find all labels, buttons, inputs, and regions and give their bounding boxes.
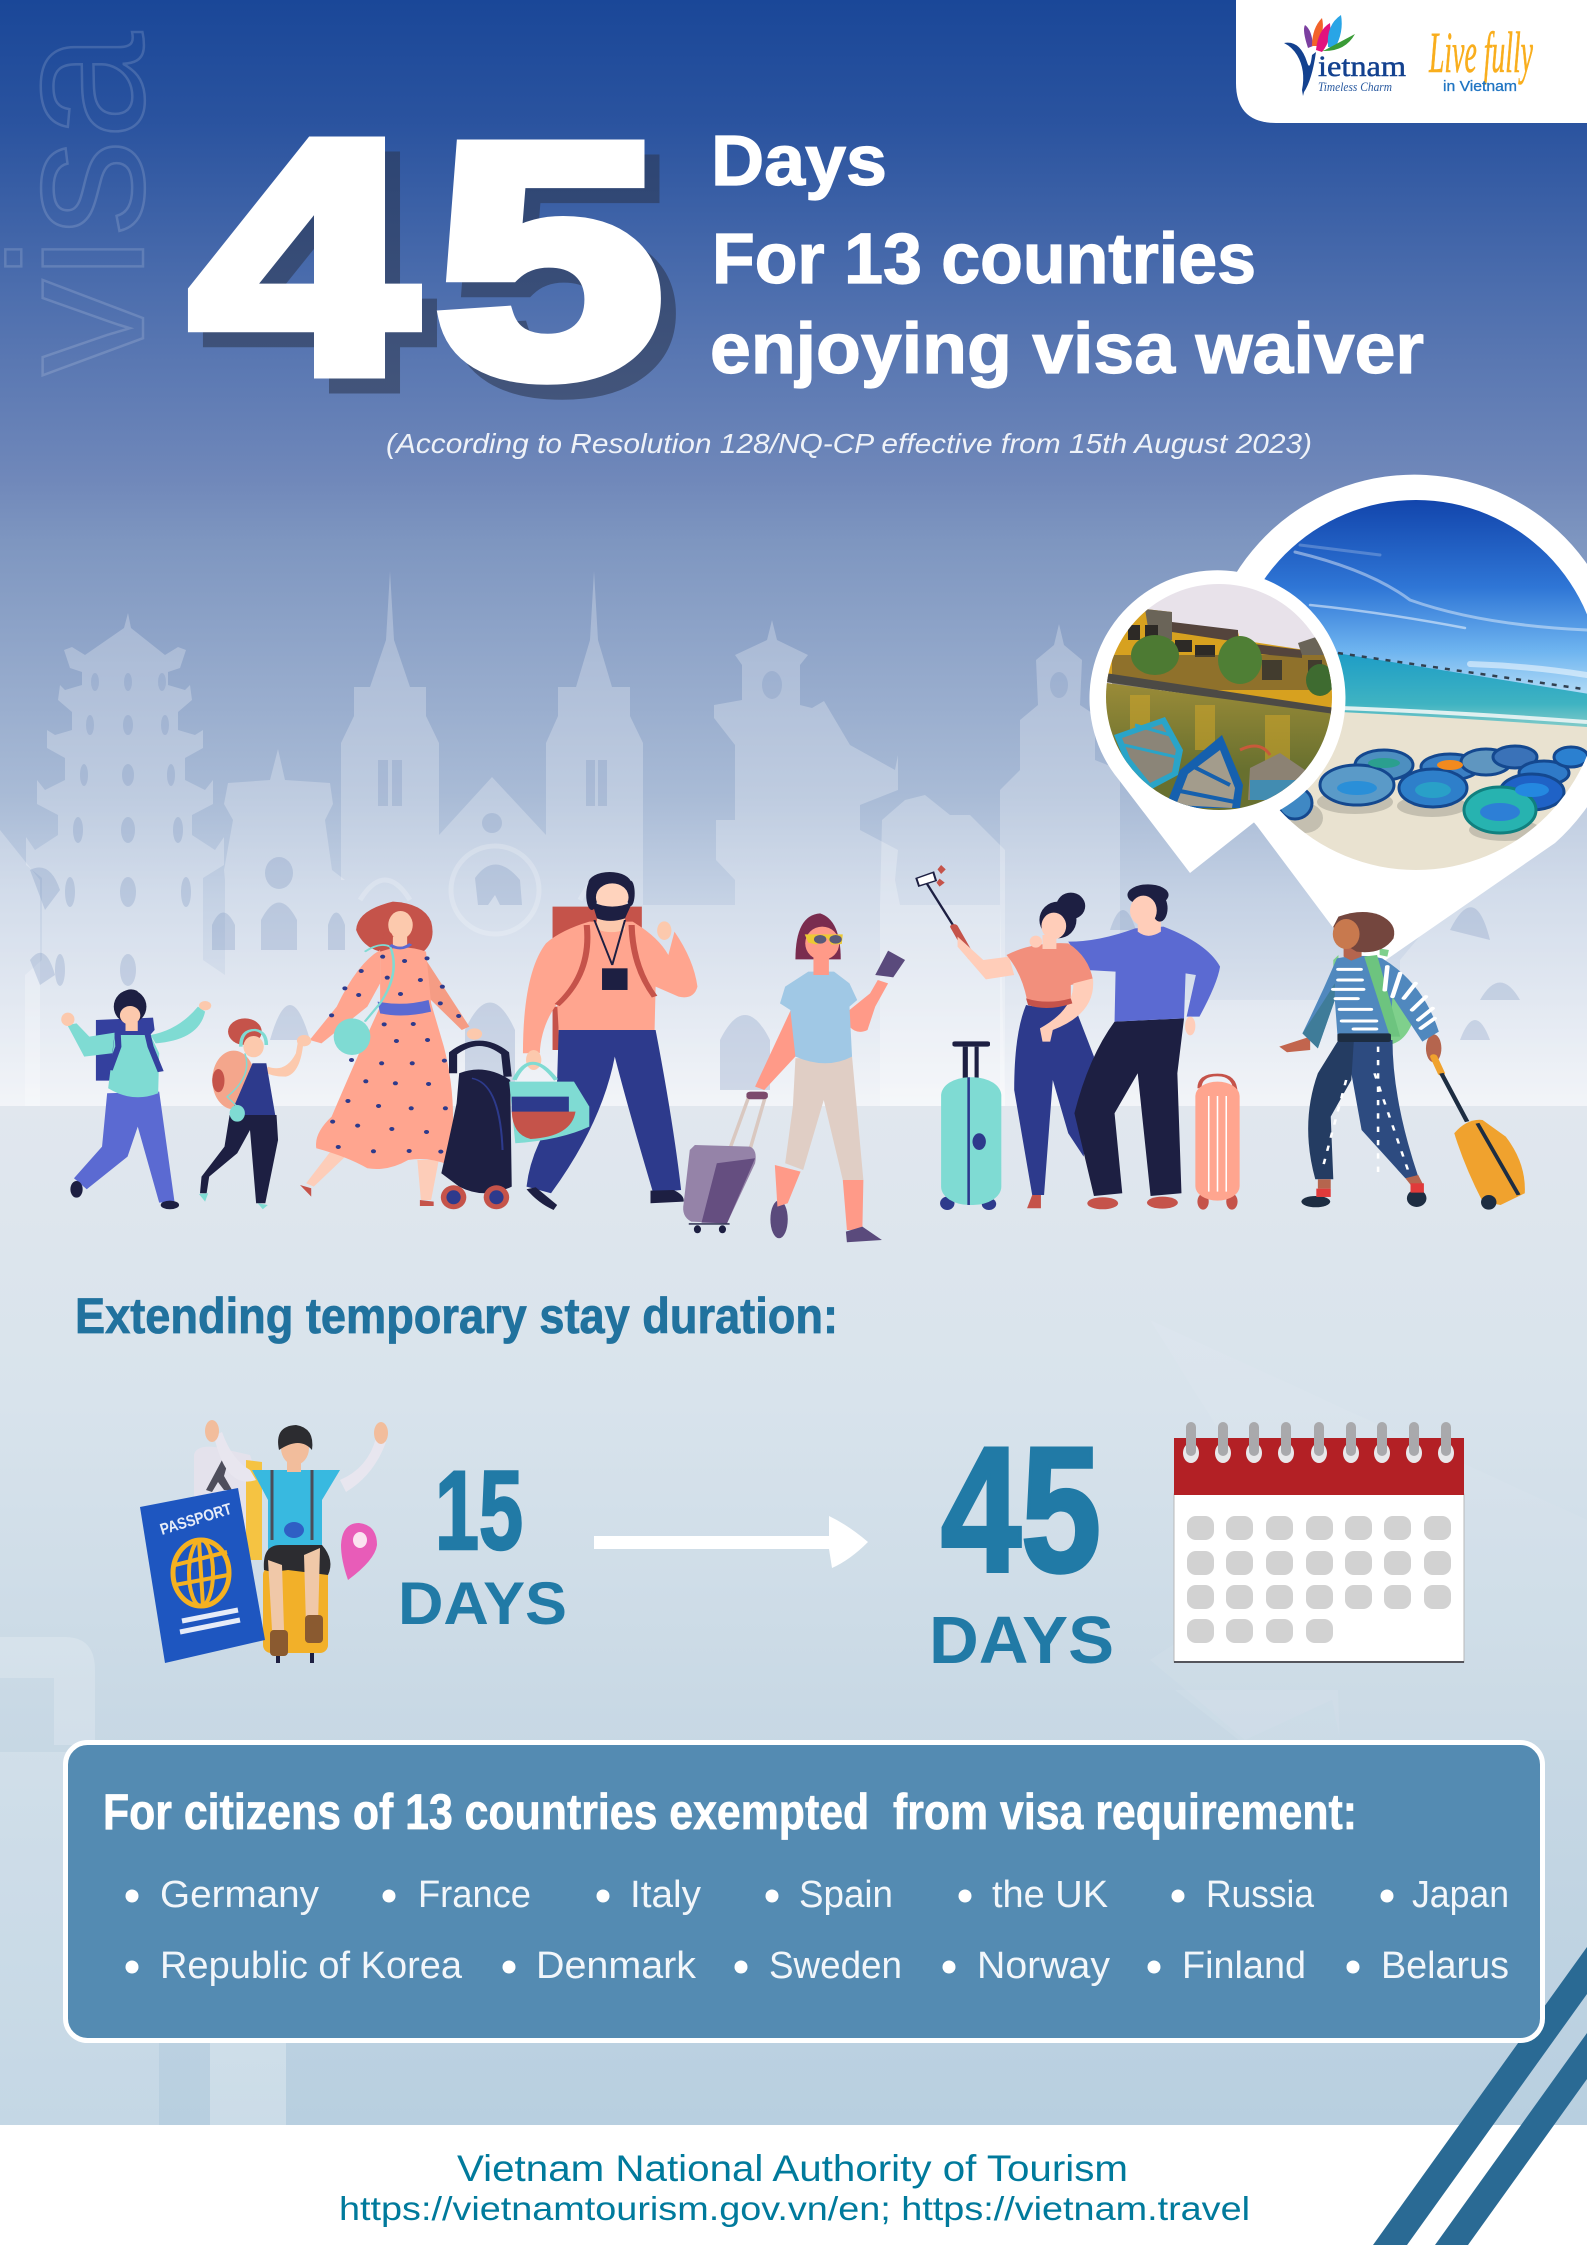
suitcase xyxy=(263,1567,328,1653)
logo: Vietnam Timeless Charm: Timeless Charm xyxy=(1318,79,1392,94)
headline text: Days xyxy=(711,122,887,201)
big number 45: 4 xyxy=(206,87,433,456)
logo: Live fully in Vietnam xyxy=(1429,20,1533,95)
background: sky gradient xyxy=(0,0,1587,1107)
country list: row 1: Germany xyxy=(160,1874,319,1916)
location pin: Hoi An photo xyxy=(1089,570,1345,873)
footer: organisation and links: Vietnam National Authority of Tourism xyxy=(457,2148,1128,2189)
country list: row 1: France xyxy=(418,1874,531,1916)
country list: row 2: Belarus xyxy=(1381,1945,1509,1987)
ticket xyxy=(194,1447,262,1560)
section heading: extending stay: Extending temporary stay duration: xyxy=(75,1288,838,1344)
big number 45 xyxy=(191,72,678,459)
headline text xyxy=(710,122,1424,389)
number: 45 days: DAYS xyxy=(929,1603,1114,1678)
icon: passport and traveller xyxy=(140,1420,388,1663)
country list: row 1: Italy xyxy=(630,1874,701,1916)
footer: organisation and links xyxy=(339,2148,1250,2227)
country list: row 2: Denmark xyxy=(536,1945,697,1987)
panel heading: For citizens of 13 countries exempted from visa requirement: xyxy=(103,1784,1357,1840)
travellers: right group xyxy=(775,865,1525,1242)
country list: row 1: Spain xyxy=(799,1874,893,1916)
dark suitcase with red wheels xyxy=(441,1043,512,1209)
passport: PASSPORT xyxy=(158,1501,234,1539)
location pin: beach photo xyxy=(1237,474,1587,960)
person: woman with sunglasses and phone xyxy=(775,913,905,1242)
country list: row 2: Norway xyxy=(977,1945,1110,1987)
big number 45: 5 xyxy=(450,90,678,459)
big number 45: 4 xyxy=(191,72,418,441)
country list: row 2: Republic of Korea xyxy=(160,1945,463,1987)
country list: row 2 xyxy=(126,1945,1509,1987)
big number 45: 5 xyxy=(435,75,663,444)
person: bearded man with backpack xyxy=(523,872,697,1210)
travellers illustration xyxy=(61,865,1525,1242)
logo card xyxy=(1236,0,1587,123)
person: woman in polka dot dress xyxy=(297,902,482,1206)
headline text: For 13 countries xyxy=(712,220,1256,299)
number: 45 days xyxy=(929,1410,1114,1678)
teal suitcase xyxy=(940,1041,1001,1210)
logo: Live fully in Vietnam: in Vietnam xyxy=(1443,79,1517,95)
footer: organisation and links: https://vietnamtourism.gov.vn/en; https://vietnam.travel xyxy=(339,2190,1250,2227)
diagonal stripes xyxy=(1373,1947,1587,2245)
number: 15 days xyxy=(398,1448,567,1637)
country list: row 1: Russia xyxy=(1206,1874,1315,1916)
subtitle: resolution note: (According to Resolution 128/NQ-CP effective from 15th August 2023) xyxy=(386,428,1312,459)
number: 15 days: DAYS xyxy=(398,1570,567,1637)
arrow: 15 to 45 xyxy=(594,1516,868,1568)
logo: Vietnam Timeless Charm xyxy=(1284,15,1406,96)
number: 15 days: 15 xyxy=(435,1448,523,1573)
panel: visa-exempt countries xyxy=(66,1742,1542,2040)
country list: row 2: Sweden xyxy=(769,1945,902,1987)
peach suitcase xyxy=(1195,1075,1240,1210)
person: girl with headphones xyxy=(199,1018,304,1209)
country list: row 1 xyxy=(126,1874,1509,1916)
person: couple taking a selfie xyxy=(916,865,1220,1209)
person: boy with backpack xyxy=(61,989,211,1209)
person: woman in striped sweater xyxy=(1279,912,1441,1207)
teal duffel bag xyxy=(509,1063,589,1143)
number: 45 days: 45 xyxy=(941,1410,1101,1609)
country list: row 1: Japan xyxy=(1412,1874,1509,1916)
logo: Vietnam Timeless Charm: ietnam xyxy=(1318,50,1406,83)
country list: row 1: the UK xyxy=(992,1874,1108,1916)
city skyline silhouette xyxy=(0,571,1587,1106)
purple roller case xyxy=(683,1092,768,1233)
travellers: left group xyxy=(61,872,798,1238)
footer band xyxy=(0,2125,1587,2245)
background: faint lower shapes xyxy=(0,1320,1587,2125)
traveller xyxy=(205,1420,388,1656)
passport xyxy=(140,1488,265,1663)
country list: row 2: Finland xyxy=(1182,1945,1306,1987)
headline text: enjoying visa waiver xyxy=(710,310,1424,389)
orange trolley suitcase xyxy=(1434,1057,1525,1210)
icon: map pin xyxy=(341,1523,377,1580)
background: floor gradient xyxy=(0,1106,1587,2126)
icon: calendar xyxy=(1174,1422,1464,1663)
